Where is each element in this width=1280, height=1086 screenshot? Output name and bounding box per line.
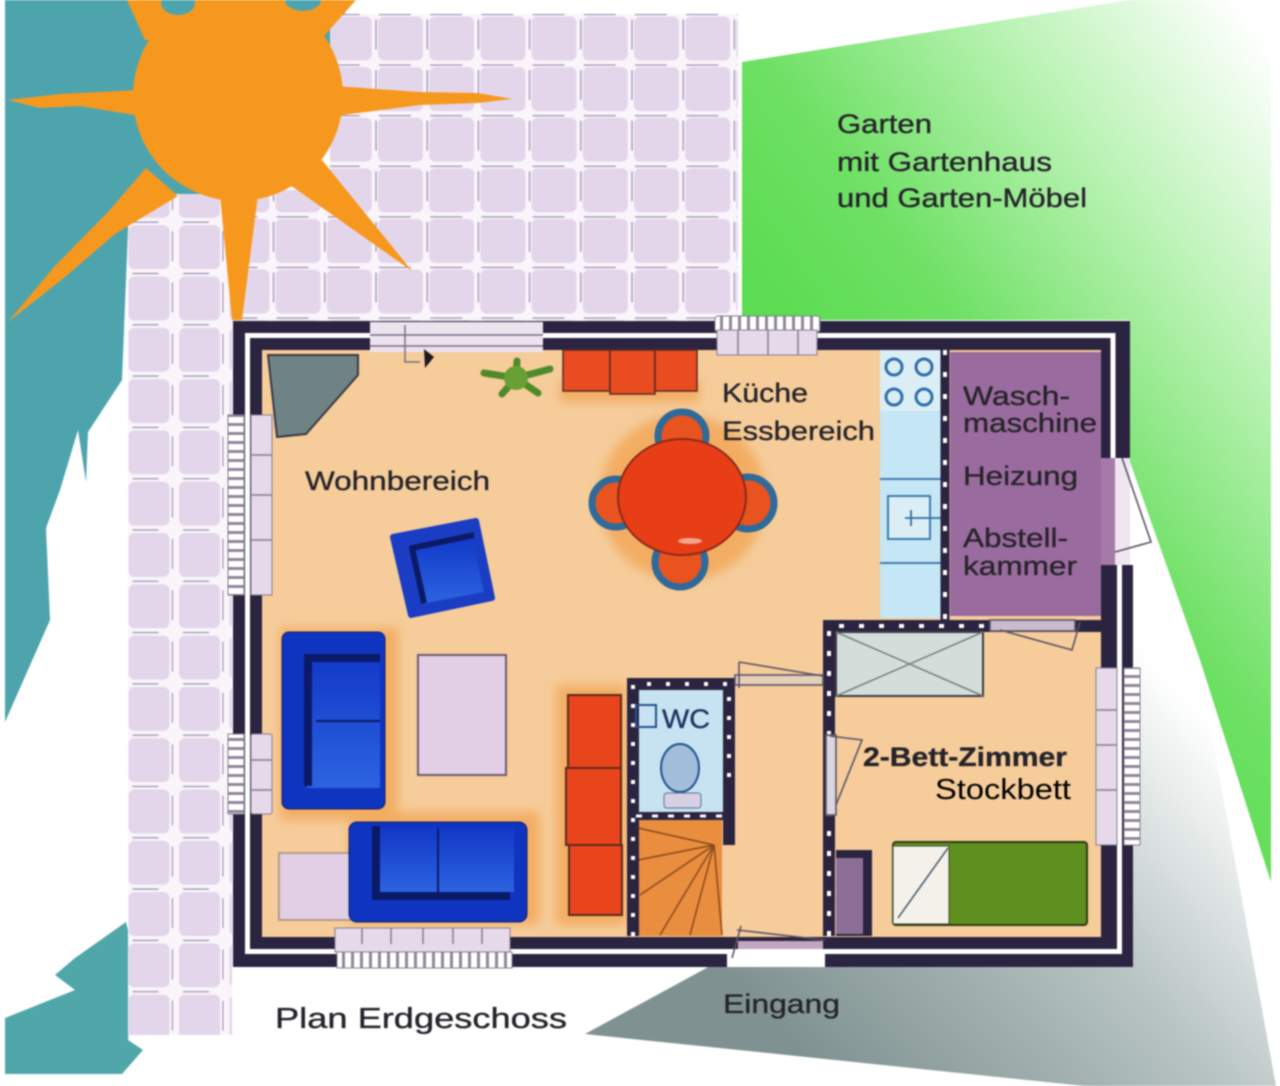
label: kitchen: Küche	[722, 378, 808, 408]
utility door on right wall	[1101, 458, 1151, 565]
stove with four burners	[880, 350, 940, 411]
round dining table	[618, 439, 746, 555]
label: bunk bed: Stockbett	[935, 774, 1071, 806]
hall door	[735, 662, 823, 688]
kitchen counter	[880, 350, 942, 618]
background: teal patch lower left	[5, 922, 143, 1074]
floor	[262, 350, 1101, 937]
left window upper	[228, 415, 272, 595]
fireplace	[268, 355, 358, 437]
floor plan: building	[228, 316, 1151, 968]
bed	[893, 842, 1087, 925]
utility room	[950, 352, 1101, 616]
top window	[715, 316, 820, 355]
lilac coffee table	[418, 655, 506, 775]
label: storage line 2: kammer	[963, 551, 1077, 581]
red sideboard	[566, 695, 622, 915]
sofa bottom	[349, 822, 527, 922]
background: green garden wedge	[742, 0, 1271, 882]
right window	[1096, 668, 1140, 845]
red bench at top wall	[563, 350, 697, 394]
kitchen partition wall	[940, 350, 950, 620]
label: entrance: Eingang	[723, 989, 840, 1019]
label: washing machine line 2: maschine	[963, 408, 1097, 438]
bedroom walls	[829, 626, 1101, 936]
orange glow around furniture	[280, 380, 765, 925]
label: ground floor plan: Plan Erdgeschoss	[275, 1003, 567, 1035]
small lilac side table	[279, 853, 351, 920]
label: storage: Abstell-	[963, 523, 1068, 553]
entrance door	[732, 926, 825, 958]
label: heating: Heizung	[963, 461, 1078, 491]
white insulation line in wall	[248, 336, 1120, 952]
armchair	[393, 521, 492, 615]
background: grey entrance wedge	[585, 640, 1276, 1086]
sofa left	[282, 632, 385, 809]
label: garden: Garten	[837, 109, 932, 139]
left window lower	[228, 734, 272, 814]
chairs around dining table	[592, 412, 774, 587]
top terrace door opening	[370, 322, 543, 368]
background: teal sky upper left	[5, 0, 345, 722]
entrance opening	[727, 952, 825, 967]
label: living area: Wohnbereich	[305, 466, 490, 496]
bedroom door opening at closet	[990, 620, 1080, 650]
lower right wall section	[1100, 565, 1133, 967]
label: garden house: mit Gartenhaus	[837, 147, 1052, 177]
bedroom door	[826, 735, 862, 815]
outer walls	[233, 321, 1130, 967]
label: washing machine: Wasch-	[963, 381, 1070, 411]
WC room floor	[636, 688, 724, 812]
terrace: upper paved area	[232, 14, 738, 322]
stairs	[636, 820, 722, 936]
label: dining area: Essbereich	[722, 416, 875, 446]
sink	[880, 479, 942, 563]
icon: orange sun	[8, 0, 512, 322]
plant	[484, 361, 550, 394]
label: garden furniture: und Garten-Möbel	[837, 183, 1087, 213]
built-in closet	[836, 850, 872, 936]
label: WC: WC	[662, 704, 710, 734]
label: two-bed room: 2-Bett-Zimmer	[863, 742, 1068, 772]
terrace: left paved column	[128, 194, 232, 1035]
WC toilet	[636, 705, 701, 808]
bottom window	[335, 928, 512, 968]
WC walls	[633, 684, 729, 936]
wardrobe with cross	[836, 632, 983, 696]
